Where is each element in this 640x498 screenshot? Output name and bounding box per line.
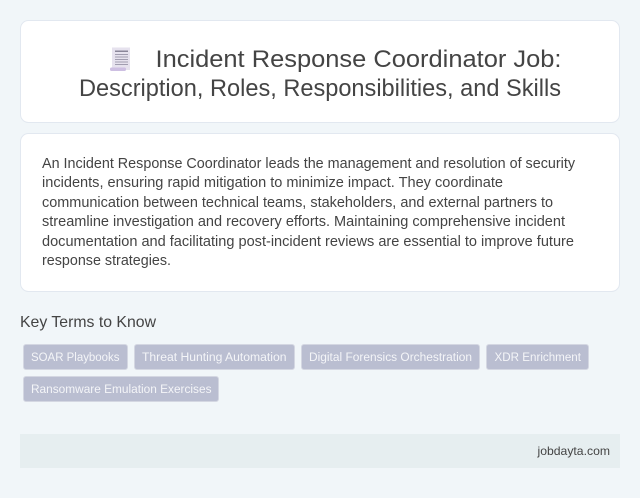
chip: Threat Hunting Automation: Threat Hunting Automation <box>142 350 286 364</box>
text block: description: incidents, ensuring rapid mitigation to minimize impact. They coordinate <box>42 175 503 191</box>
text block: description: communication between technical teams, stakeholders, and external partners to <box>42 195 553 211</box>
text block: description: streamline investigation and recovery efforts. Maintaining comprehensive incident <box>42 214 565 230</box>
chip: XDR Enrichment: XDR Enrichment <box>494 350 582 364</box>
chip: Threat Hunting Automation <box>134 344 294 370</box>
panel: title card <box>20 20 620 122</box>
icon: document scroll <box>110 48 130 71</box>
text block: description: documentation and facilitating post-incident reviews are essential to improve future <box>42 234 574 250</box>
footer <box>20 434 620 468</box>
chip: Digital Forensics Orchestration: Digital Forensics Orchestration <box>309 350 472 364</box>
chip: Digital Forensics Orchestration <box>302 344 480 370</box>
footer: source: jobdayta.com <box>536 444 610 458</box>
heading: key terms: Key Terms to Know <box>20 314 156 331</box>
text block: description: response strategies. <box>42 253 171 269</box>
chip: XDR Enrichment <box>486 344 588 370</box>
chip: Ransomware Emulation Exercises: Ransomware Emulation Exercises <box>31 382 212 396</box>
title <box>79 46 562 102</box>
text block: description: An Incident Response Coordinator leads the management and resolution of security <box>42 156 576 172</box>
text block: description <box>42 156 576 269</box>
chip: SOAR Playbooks: SOAR Playbooks <box>31 350 120 364</box>
chips: key terms <box>24 344 588 402</box>
chip: SOAR Playbooks <box>24 344 128 370</box>
panel: description <box>20 134 620 292</box>
chip: Ransomware Emulation Exercises <box>24 376 218 402</box>
title: Incident Response Coordinator Job: <box>156 46 562 73</box>
title: Description, Roles, Responsibilities, and Skills <box>79 75 561 102</box>
